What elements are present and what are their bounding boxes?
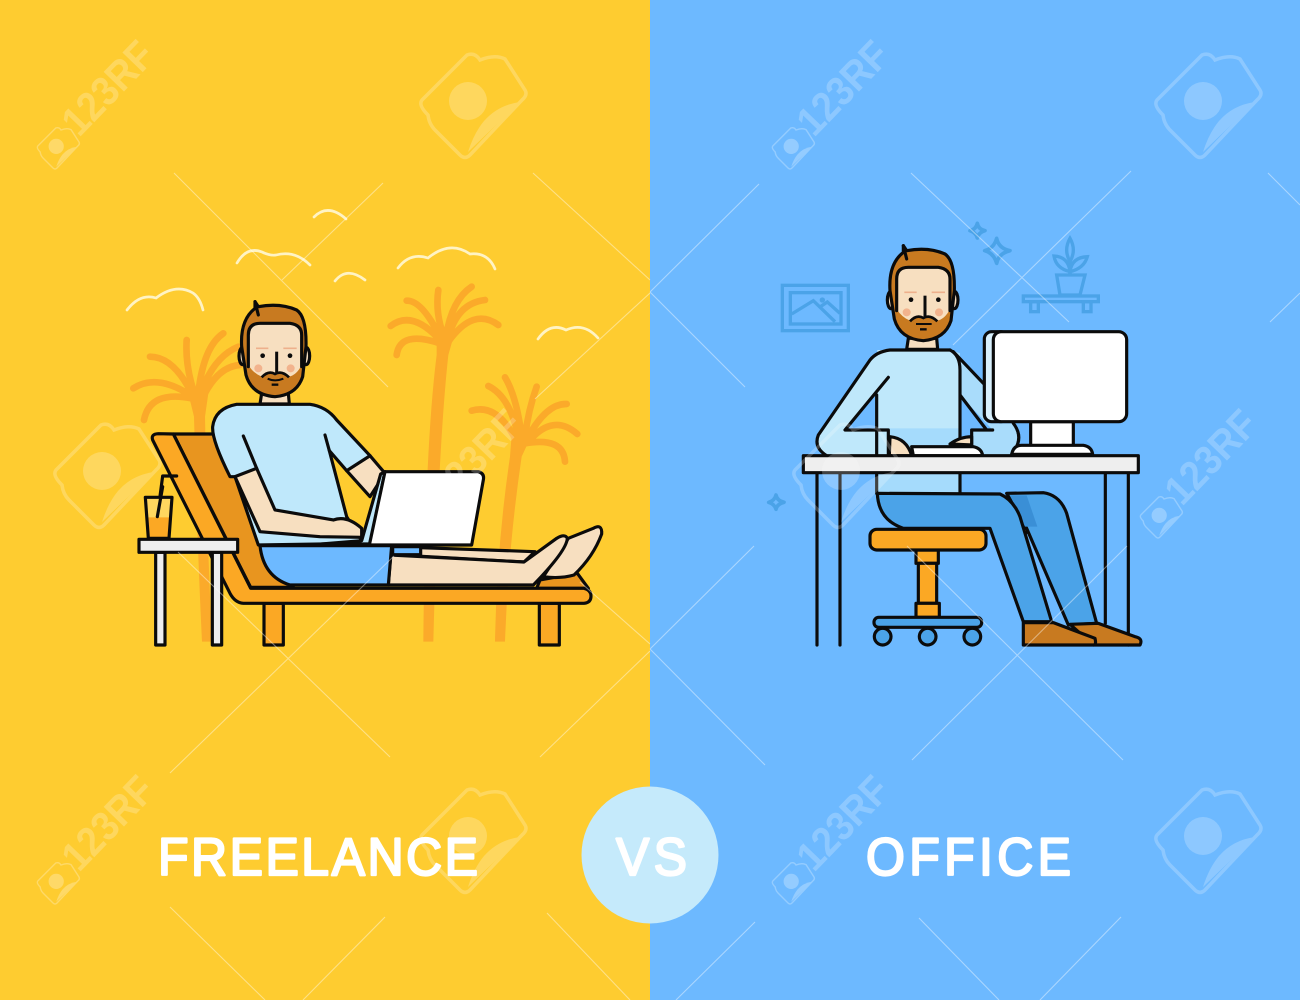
watermark diagonal lines bbox=[170, 171, 1300, 1000]
watermark: 123RF logos: 123RF bbox=[1155, 401, 1266, 513]
far arm bbox=[952, 350, 1019, 455]
computer monitor bbox=[984, 332, 1127, 454]
neck bbox=[260, 393, 289, 404]
wall decor icons bbox=[769, 223, 1098, 509]
watermark: 123RF logos: 123RF bbox=[787, 767, 898, 879]
watermark: 123RF logos: 123RF bbox=[787, 32, 898, 144]
forearm and hand bbox=[235, 468, 362, 537]
laptop bbox=[322, 472, 385, 544]
palm trees bbox=[133, 287, 577, 642]
panel: freelance background bbox=[0, 0, 650, 1000]
shoes bbox=[1070, 623, 1141, 645]
man reclining with laptop bbox=[213, 302, 602, 585]
head bbox=[239, 302, 310, 397]
shorts bbox=[260, 546, 392, 585]
illustration: freelancer on sun lounger bbox=[133, 287, 602, 645]
hands and keyboard bbox=[889, 437, 912, 456]
panel: office background bbox=[650, 0, 1300, 1000]
watermark: 123RF logos: 123RF bbox=[420, 401, 531, 513]
desk top bbox=[803, 456, 1138, 473]
vs badge: VS bbox=[616, 827, 687, 886]
t-shirt bbox=[213, 404, 370, 545]
vs badge bbox=[582, 786, 718, 924]
neck bbox=[907, 338, 938, 349]
clouds and birds bbox=[127, 210, 598, 339]
heading: freelance: FREELANCE bbox=[158, 827, 478, 886]
desk legs bbox=[817, 473, 1128, 645]
man at desk bbox=[816, 246, 1141, 645]
side table with drink bbox=[139, 476, 238, 645]
illustration: office worker at desk bbox=[769, 223, 1141, 645]
watermark: 123RF logos: 123RF bbox=[52, 32, 163, 144]
torso bbox=[877, 350, 960, 430]
sun lounger bbox=[152, 434, 591, 645]
near arm bbox=[816, 350, 907, 456]
heading: office: OFFICE bbox=[866, 827, 1071, 886]
head bbox=[887, 246, 958, 341]
office chair bbox=[870, 528, 1037, 645]
watermark: 123RF logos: 123RF bbox=[52, 767, 163, 879]
near leg bbox=[877, 493, 1052, 622]
far leg bbox=[1007, 493, 1097, 625]
